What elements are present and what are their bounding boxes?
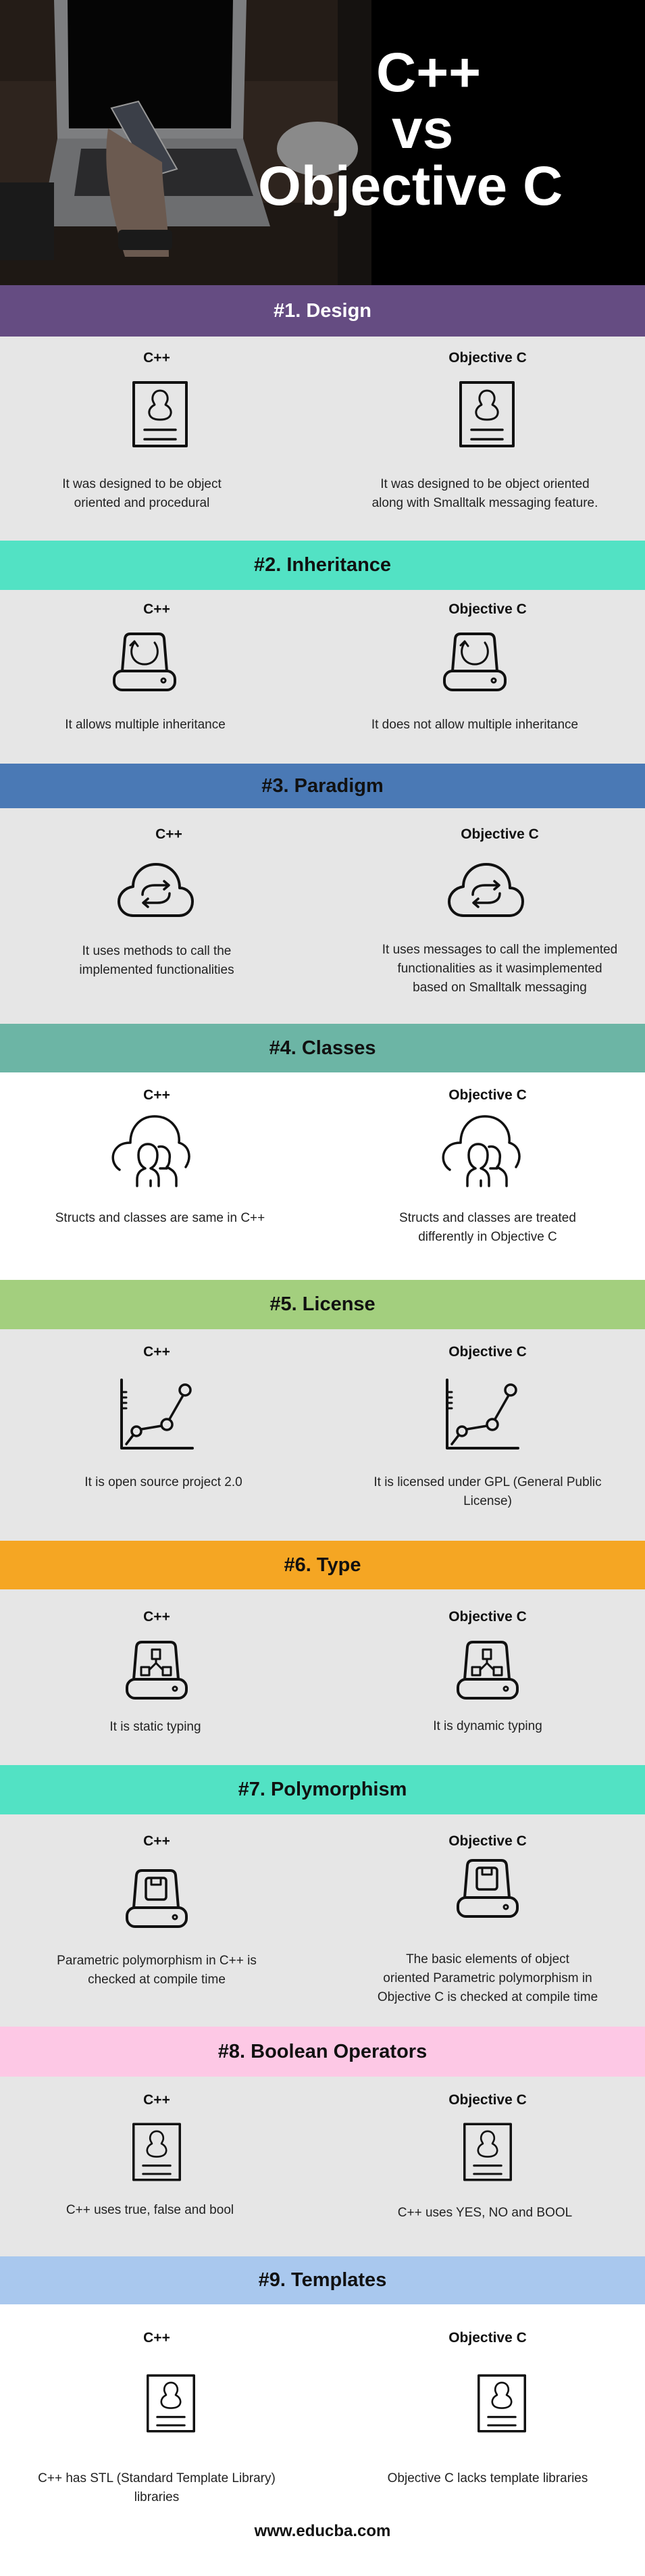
text objc xyxy=(399,1211,576,1244)
title: Objective C xyxy=(258,155,563,217)
label objc: Objective C xyxy=(448,601,527,617)
text objc: It is dynamic typing xyxy=(433,1719,542,1733)
heading: inheritance: #2. Inheritance xyxy=(254,554,391,576)
heading: classes xyxy=(0,1024,645,1072)
hero banner xyxy=(0,0,645,285)
label cpp: C++ xyxy=(143,2330,170,2346)
label objc: Objective C xyxy=(448,2092,527,2108)
label cpp: C++ xyxy=(143,350,170,366)
label objc: Objective C xyxy=(448,1087,527,1103)
text objc xyxy=(378,1952,598,2004)
heading: paradigm: #3. Paradigm xyxy=(261,774,384,796)
text objc: License) xyxy=(463,1494,512,1508)
icon: drive floppy xyxy=(126,1869,188,1928)
label objc: Objective C xyxy=(448,1344,527,1360)
icon: profile card xyxy=(132,2123,181,2181)
text cpp: Structs and classes are same in C++ xyxy=(55,1211,265,1225)
icon: profile card xyxy=(478,2375,526,2433)
text objc: based on Smalltalk messaging xyxy=(413,981,587,995)
icon: drive network xyxy=(126,1641,188,1700)
icon: cloud sync xyxy=(118,863,194,917)
text objc: along with Smalltalk messaging feature. xyxy=(372,496,598,510)
icon: profile card xyxy=(463,2123,512,2181)
text objc: differently in Objective C xyxy=(418,1230,557,1244)
heading: design: #1. Design xyxy=(274,300,371,322)
footer url: www.educba.com xyxy=(255,2522,390,2540)
icon: profile card xyxy=(147,2375,195,2433)
label cpp: C++ xyxy=(143,1609,170,1625)
icon: profile card xyxy=(132,381,188,447)
text objc: It is licensed under GPL (General Public xyxy=(373,1475,602,1489)
text objc: C++ uses YES, NO and BOOL xyxy=(398,2206,572,2220)
hero photo xyxy=(0,0,371,285)
text cpp: It is open source project 2.0 xyxy=(84,1475,242,1489)
panel: 6 type xyxy=(0,1541,645,1765)
icon: cloud sync xyxy=(448,863,524,917)
text cpp: C++ has STL (Standard Template Library) xyxy=(38,2471,276,2485)
panel: 2 inheritance xyxy=(0,541,645,764)
text objc: Objective C is checked at compile time xyxy=(378,1990,598,2004)
text cpp xyxy=(79,944,234,977)
label cpp: C++ xyxy=(143,1087,170,1103)
text cpp: It uses methods to call the xyxy=(82,944,231,958)
heading: boolean operators xyxy=(0,2027,645,2077)
label cpp: C++ xyxy=(143,2092,170,2108)
heading: templates xyxy=(0,2256,645,2304)
text objc: It uses messages to call the implemented xyxy=(382,943,617,957)
heading: license xyxy=(0,1280,645,1329)
text cpp: oriented and procedural xyxy=(74,496,209,510)
heading: polymorphism: #7. Polymorphism xyxy=(238,1779,407,1800)
label objc: Objective C xyxy=(448,1609,527,1625)
title: C++ xyxy=(376,42,481,103)
text cpp xyxy=(57,1954,257,1987)
text cpp: It was designed to be object xyxy=(62,477,222,491)
label objc: Objective C xyxy=(448,1833,527,1849)
heading: polymorphism xyxy=(0,1765,645,1814)
text objc: Objective C lacks template libraries xyxy=(388,2471,588,2485)
text objc: Structs and classes are treated xyxy=(399,1211,576,1225)
text objc: It was designed to be object oriented xyxy=(380,477,590,491)
heading: templates: #9. Templates xyxy=(259,2269,386,2291)
heading: inheritance xyxy=(0,541,645,590)
text cpp: C++ uses true, false and bool xyxy=(66,2203,234,2217)
text cpp: It allows multiple inheritance xyxy=(65,718,226,732)
heading: boolean operators: #8. Boolean Operators xyxy=(218,2041,427,2062)
label objc: Objective C xyxy=(448,2330,527,2346)
icon: drive refresh xyxy=(113,633,176,691)
text cpp xyxy=(62,477,222,510)
icon: drive floppy xyxy=(457,1859,519,1918)
icon: line chart xyxy=(120,1379,194,1450)
label cpp: C++ xyxy=(143,1344,170,1360)
text cpp: checked at compile time xyxy=(88,1973,226,1987)
panel: 5 license xyxy=(0,1280,645,1541)
icon: drive refresh xyxy=(443,633,507,691)
icon: drive network xyxy=(457,1641,519,1700)
text cpp: Parametric polymorphism in C++ is xyxy=(57,1954,257,1968)
text cpp xyxy=(38,2471,276,2504)
heading: paradigm xyxy=(0,764,645,808)
text objc xyxy=(372,477,598,510)
panel: 4 classes xyxy=(0,1024,645,1244)
text cpp: It is static typing xyxy=(109,1720,201,1734)
panel: 9 templates xyxy=(0,2256,645,2540)
label objc: Objective C xyxy=(461,826,539,842)
text objc xyxy=(382,943,617,995)
panel: 7 polymorphism xyxy=(0,1765,645,2027)
heading: type xyxy=(0,1541,645,1589)
label cpp: C++ xyxy=(143,1833,170,1849)
label objc: Objective C xyxy=(448,350,527,366)
panel: 8 boolean operators xyxy=(0,2027,645,2256)
text cpp: implemented functionalities xyxy=(79,963,234,977)
panel: 3 paradigm xyxy=(0,764,645,1024)
label cpp: C++ xyxy=(155,826,182,842)
label cpp: C++ xyxy=(143,601,170,617)
icon: cloud people xyxy=(112,1115,190,1187)
text cpp: libraries xyxy=(134,2490,179,2504)
title xyxy=(258,42,563,217)
icon: cloud people xyxy=(442,1115,521,1187)
text objc: It does not allow multiple inheritance xyxy=(371,718,578,732)
heading: license: #5. License xyxy=(269,1293,376,1315)
heading: type: #6. Type xyxy=(284,1554,361,1576)
heading: classes: #4. Classes xyxy=(269,1037,376,1058)
text objc: The basic elements of object xyxy=(406,1952,569,1966)
text objc xyxy=(373,1475,602,1508)
icon: profile card xyxy=(459,381,515,447)
text objc: functionalities as it wasimplemented xyxy=(397,962,602,976)
icon: line chart xyxy=(446,1379,519,1450)
title: vs xyxy=(392,99,453,160)
heading: design xyxy=(0,285,645,337)
panel: 1 design xyxy=(0,285,645,541)
text objc: oriented Parametric polymorphism in xyxy=(383,1971,592,1985)
